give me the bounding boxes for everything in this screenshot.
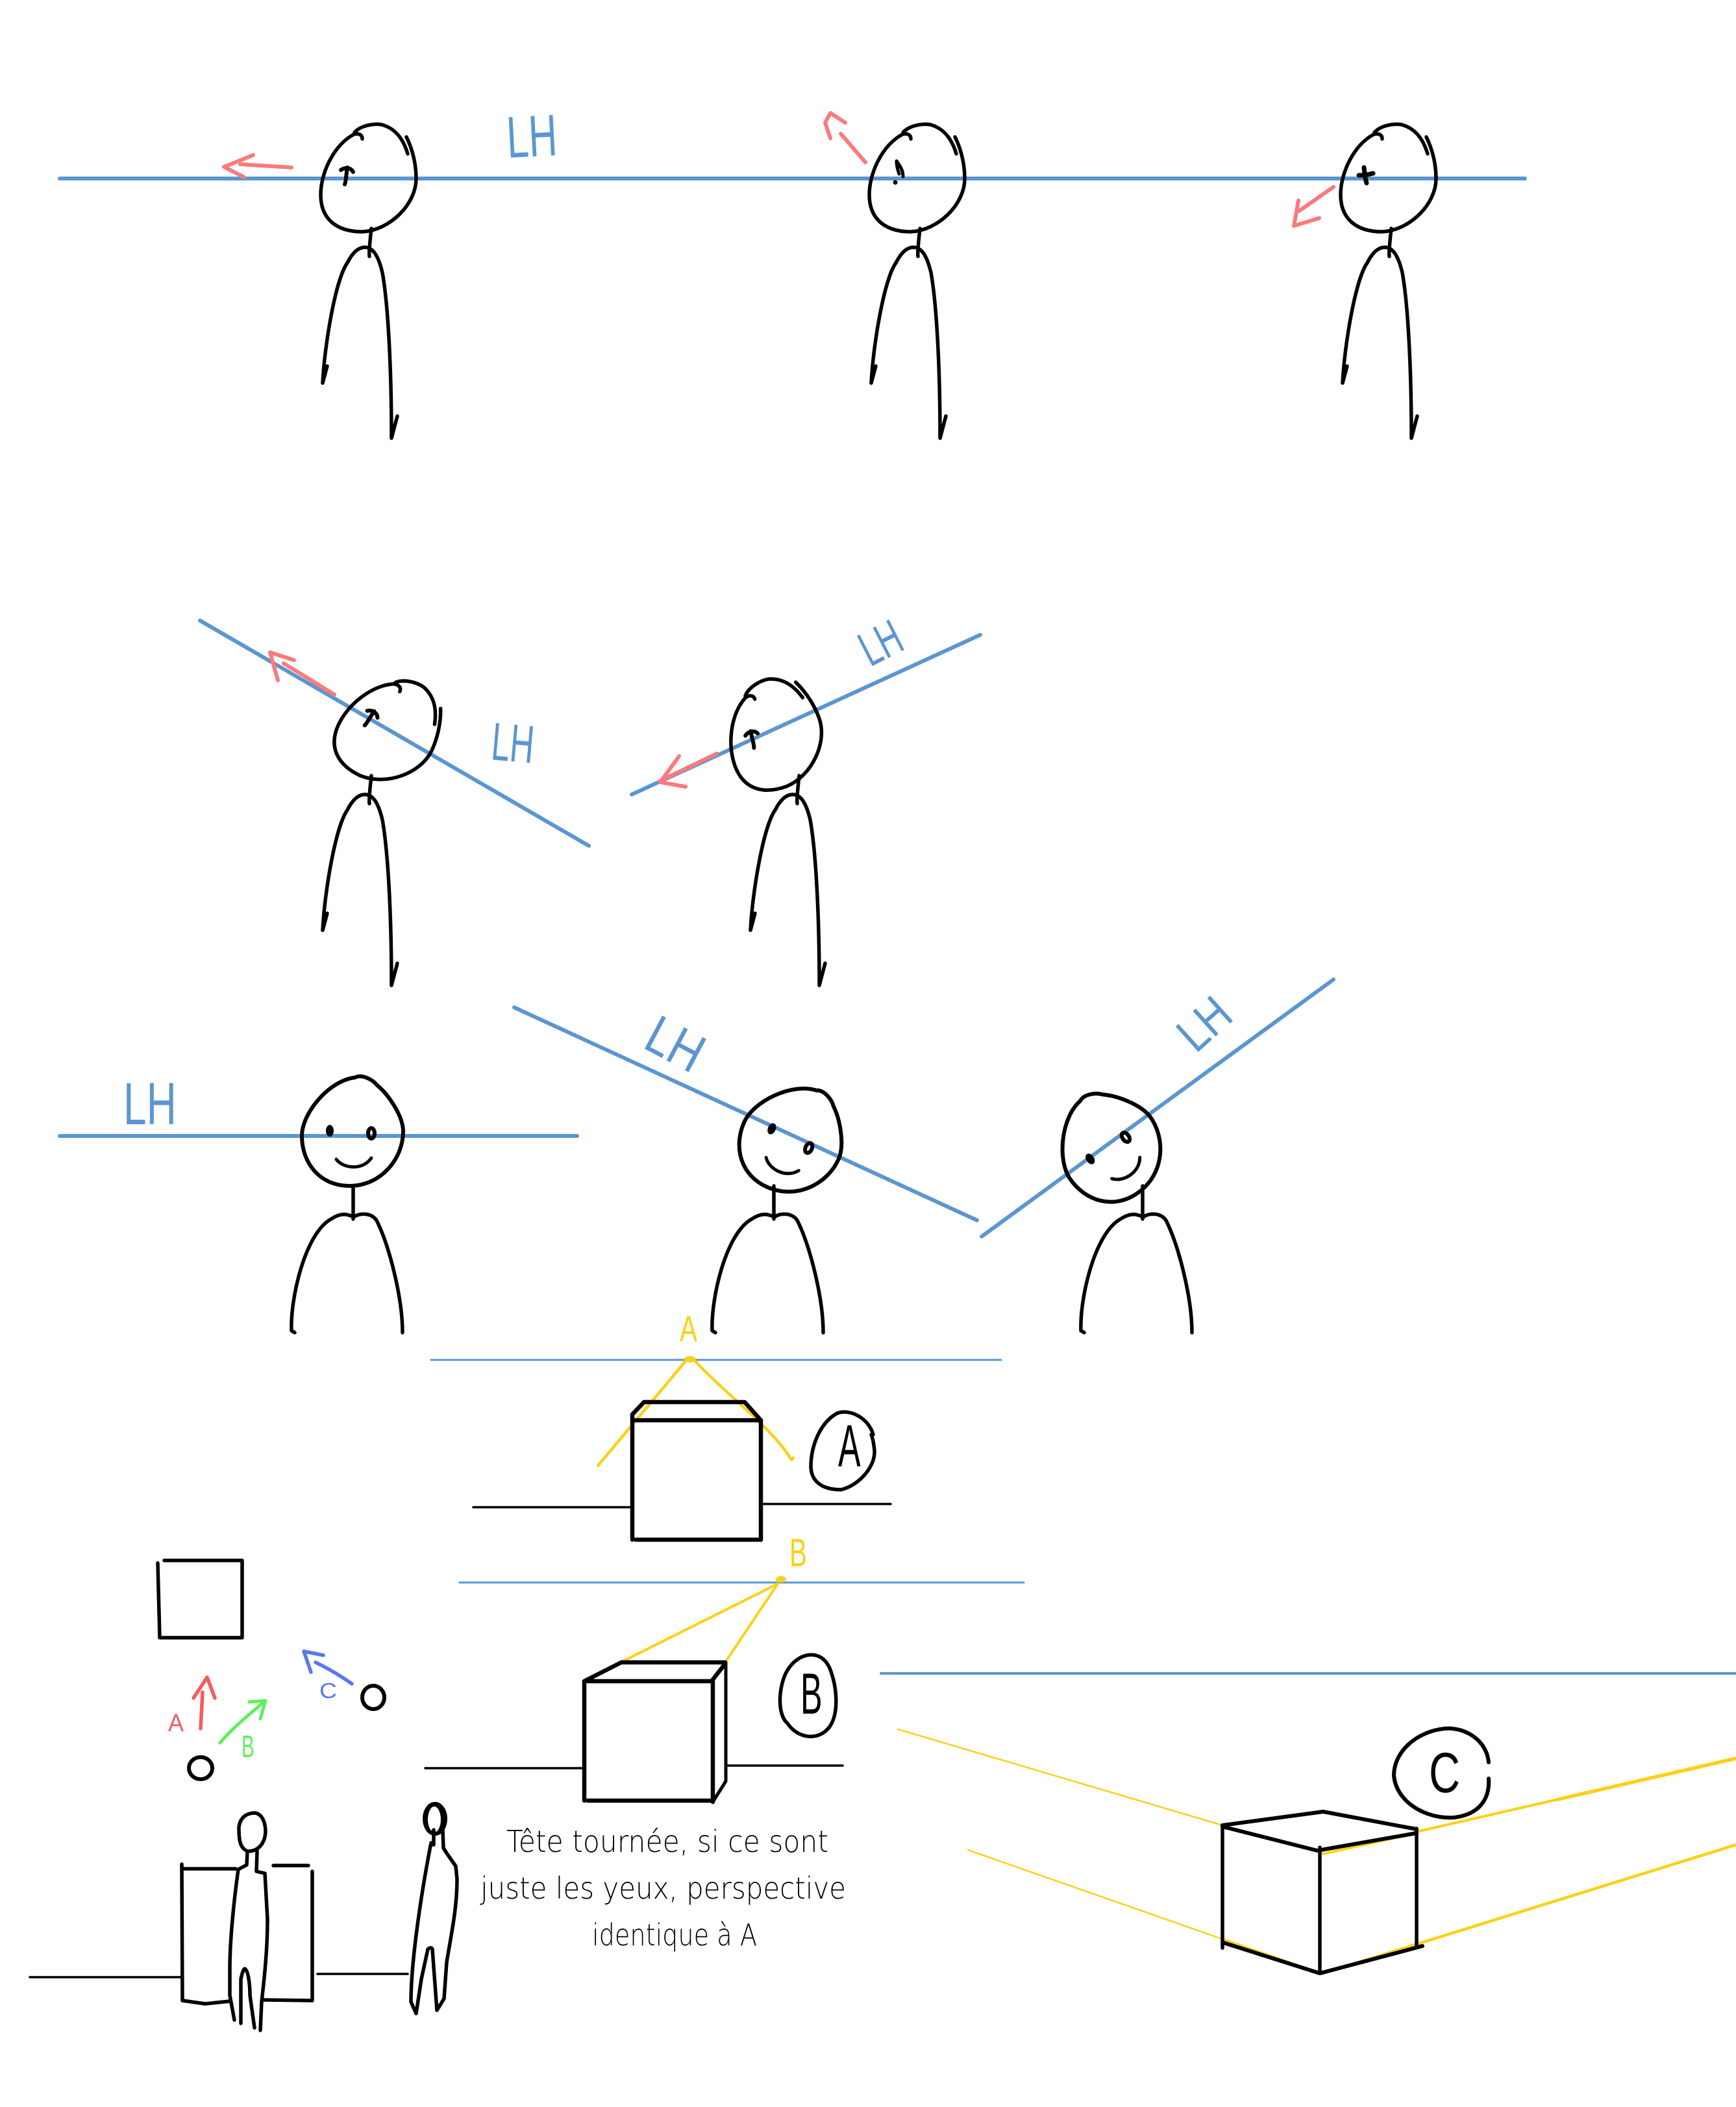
cube B: yellow vanishing letter: B (789, 1531, 807, 1575)
badge: circled A: A (838, 1413, 861, 1479)
badge: circled A (811, 1412, 874, 1490)
cube C: yellow construction lines (898, 1729, 1736, 1973)
figure: front face tilted right (712, 1068, 861, 1333)
badge: circled C (1394, 1729, 1489, 1817)
arrow: A red (193, 1677, 215, 1729)
label: C blue: C (319, 1679, 337, 1703)
figure: profile head tilted down (323, 661, 454, 985)
cube A: vanishing point and construction lines (598, 1356, 793, 1466)
arrow: red down-left (1294, 187, 1333, 226)
label: LH row 2 left: LH (489, 711, 537, 775)
note text: identique à A (592, 1917, 757, 1953)
note text: juste les yeux, perspective (480, 1871, 846, 1906)
arrow: red along tilted line (270, 652, 334, 695)
cube B: horizon line (460, 1581, 1024, 1584)
horizon line: row 3 left (60, 1134, 577, 1138)
cube B (584, 1662, 726, 1802)
note text (480, 1824, 846, 1953)
badge: circled B (780, 1655, 836, 1736)
label: LH row 1: LH (505, 103, 559, 171)
note text: Tête tournée, si ce sont (506, 1824, 828, 1859)
cube C (1222, 1812, 1422, 1973)
scene: figure seen in profile (411, 1804, 457, 2014)
figure: profile looking toward viewer (1341, 124, 1436, 438)
horizon line: row 2 left, tilted (200, 621, 589, 846)
label: LH row 3 left: LH (123, 1070, 177, 1137)
scene: box behind figure (182, 1864, 312, 2004)
label: LH row 3 center: LH (636, 1004, 715, 1085)
arrow: B green (220, 1701, 266, 1743)
figure: profile head tilted up (711, 667, 837, 985)
label: B green: B (242, 1730, 254, 1764)
cube A: ground lines (473, 1504, 891, 1507)
horizon line: row 3 center, tilted (514, 1007, 977, 1220)
figure: profile looking away (869, 124, 965, 438)
cube A (632, 1402, 761, 1540)
arrow: red along tilted line right (660, 754, 717, 787)
scene: ground lines (30, 1974, 408, 1977)
top view: box (158, 1560, 242, 1638)
label: A red: A (168, 1708, 184, 1736)
arrow: red left (224, 155, 291, 177)
horizon line: row 1 (60, 177, 1525, 180)
figure: front face tilted left (1036, 1072, 1192, 1333)
cube B: ground lines (425, 1766, 843, 1768)
figure: profile looking left (321, 124, 416, 438)
figure: front face level (291, 1076, 403, 1333)
badge: circled B: B (800, 1662, 823, 1727)
horizon line: row 3 right, tilted (982, 980, 1333, 1237)
arrow: red up-left (825, 113, 865, 162)
badge: circled C: C (1429, 1742, 1460, 1805)
label: LH row 2 right: LH (850, 609, 911, 677)
cube B: vanishing point and construction lines (583, 1576, 786, 1682)
horizon line: row 2 right, tilted (632, 635, 980, 795)
top view: viewer position 2 (362, 1686, 384, 1709)
top view: viewer position 1 (189, 1757, 212, 1779)
cube A: yellow vanishing letter: A (680, 1309, 697, 1349)
cube C: horizon line (881, 1672, 1736, 1675)
label: LH row 3 right: LH (1166, 985, 1243, 1062)
cube A: horizon line (431, 1359, 1001, 1361)
scene: figure seen from behind at box (230, 1813, 267, 2030)
arrow: C blue (304, 1651, 352, 1684)
